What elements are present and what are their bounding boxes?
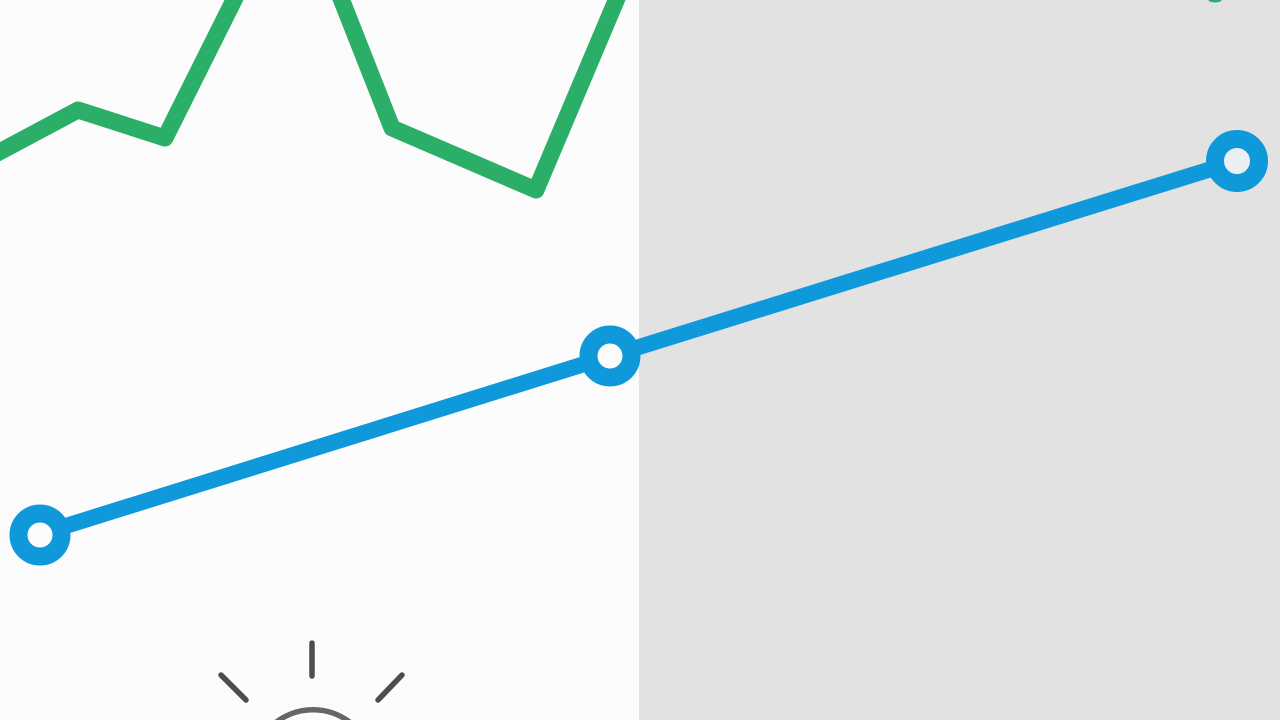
data point: first: [18, 514, 62, 556]
green line series: [0, 0, 618, 190]
panel: left light background: [0, 0, 639, 720]
panel: right gray background: [639, 0, 1280, 720]
icon: light bulb with rays: [221, 643, 402, 720]
green line fragment at top right: [1208, 0, 1222, 2]
data point: third: [1215, 139, 1259, 183]
data point: second: [588, 334, 632, 378]
blue line series: [18, 139, 1259, 556]
